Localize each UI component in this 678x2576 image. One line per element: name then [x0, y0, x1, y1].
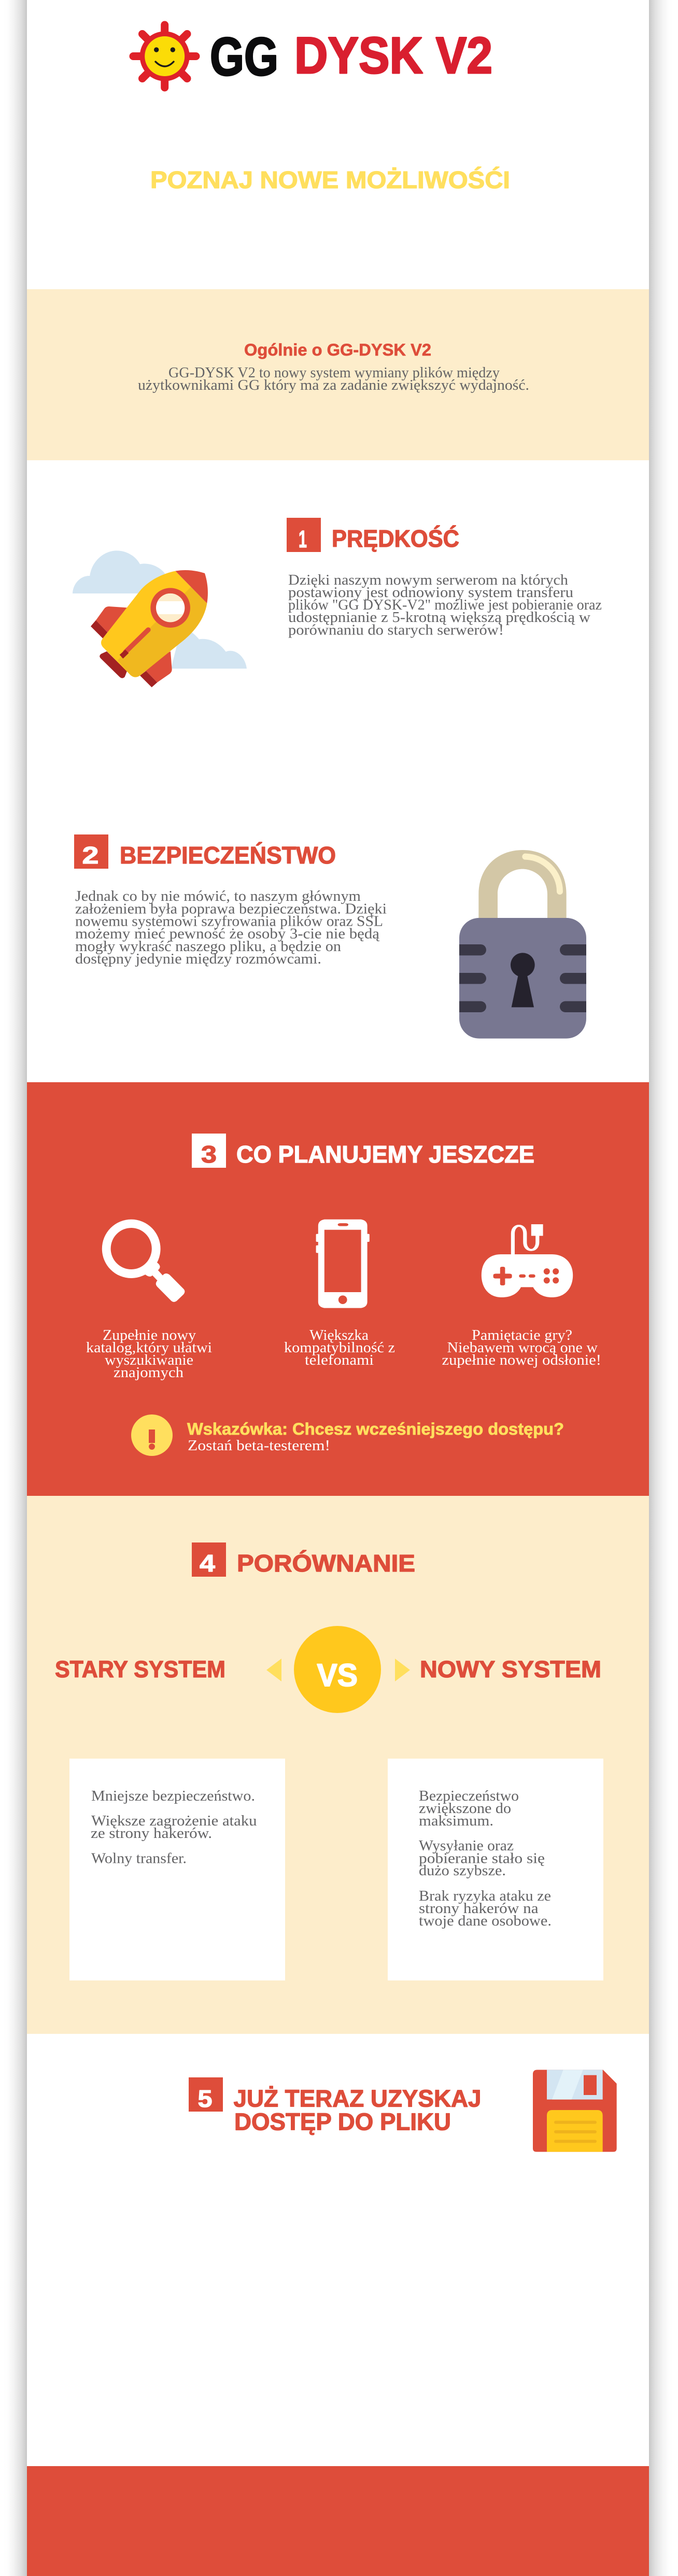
- caption: new catalog: znajomych: [114, 1364, 184, 1381]
- panel: section 4 comparison: [27, 1496, 649, 2034]
- security text: dostępny jedynie między rozmówcami.: [75, 951, 321, 967]
- card: old system: ze strony hakerów.: [91, 1825, 212, 1842]
- icon: exclamation: [131, 1414, 173, 1456]
- number badge 5: 5: [198, 2085, 213, 2112]
- speed text: [288, 572, 602, 639]
- card: new system: twoje dane osobowe.: [419, 1913, 552, 1929]
- card: new system: strony hakerów na: [419, 1901, 539, 1917]
- speed text: postawiony jest odnowiony system transferu: [288, 585, 573, 601]
- security text: mogły wykraść naszego pliku, a będzie on: [75, 939, 341, 955]
- security text: nowemu systemowi szyfrowania plików oraz SSL: [75, 914, 383, 930]
- caption: phone compatibility: Większka: [309, 1327, 369, 1343]
- heading: access: DOSTĘP DO PLIKU: [234, 2108, 451, 2135]
- header logo: [133, 25, 492, 88]
- heading: access: [233, 2085, 481, 2135]
- caption: new catalog: Zupełnie nowy: [103, 1327, 196, 1343]
- tip text: Zostań beta-testerem!: [188, 1437, 330, 1454]
- number badge 2: [74, 834, 108, 869]
- speed text: plików "GG DYSK-V2" możliwe jest pobieranie oraz: [288, 597, 602, 613]
- icon: magnifier: [102, 1220, 185, 1302]
- card: old system: Większe zagrożenie ataku: [91, 1813, 257, 1829]
- caption: new catalog: [86, 1327, 212, 1381]
- card: new system: Brak ryzyka ataku ze: [419, 1888, 551, 1904]
- number badge 4: [192, 1542, 226, 1577]
- caption: new catalog: katalog,który ułatwi: [86, 1339, 212, 1356]
- card: new system: dużo szybsze.: [419, 1863, 506, 1879]
- heading: comparison: PORÓWNANIE: [237, 1550, 415, 1577]
- number badge 4: 4: [200, 1550, 215, 1577]
- icon: rocket with clouds: [73, 550, 247, 687]
- panel: section 3 plans: [27, 1082, 649, 1496]
- speed text: Dzięki naszym nowym serwerom na których: [288, 572, 568, 588]
- security text: Jednak co by nie mówić, to naszym głównym: [75, 888, 361, 904]
- icon: smartphone: [316, 1220, 370, 1308]
- panel: section 5 access: [189, 2070, 617, 2152]
- logo wordmark GG: GG: [210, 27, 278, 87]
- arrow: left: [266, 1659, 281, 1681]
- number badge 1: 1: [299, 526, 307, 553]
- overview text: użytkownikami GG który ma za zadanie zwiększyć wydajność.: [138, 377, 529, 393]
- panel: section 2 security: [74, 834, 586, 1039]
- card: new system: [388, 1759, 603, 1980]
- caption: games: Niebawem wrocą one w: [447, 1339, 598, 1356]
- card: new system: maksimum.: [419, 1813, 493, 1829]
- panel: overview: [27, 289, 649, 460]
- caption: phone compatibility: telefonami: [305, 1352, 374, 1368]
- security text: założeniem była poprawa bezpieczeństwa. Dzięki: [75, 901, 387, 917]
- label: new system: NOWY SYSTEM: [420, 1656, 601, 1682]
- number badge 5: [189, 2077, 223, 2112]
- icon: padlock: [459, 850, 586, 1039]
- vs badge: VS: [317, 1658, 358, 1693]
- overview text: [138, 365, 529, 393]
- heading: access: JUŻ TERAZ UZYSKAJ: [233, 2085, 481, 2112]
- logo wordmark DYSK V2: DYSK V2: [294, 26, 492, 84]
- tip heading: Wskazówka: Chcesz wcześniejszego dostępu?: [187, 1420, 564, 1438]
- overview text: GG-DYSK V2 to nowy system wymiany plików między: [168, 365, 500, 381]
- caption: new catalog: wyszukiwanie: [105, 1352, 193, 1368]
- heading: plans: CO PLANUJEMY JESZCZE: [236, 1141, 534, 1168]
- number badge 3: [192, 1134, 226, 1168]
- number badge 3: 3: [201, 1141, 217, 1168]
- caption: games: [442, 1327, 601, 1368]
- card: new system: pobieranie stało się: [419, 1850, 545, 1867]
- panel: section 1 speed: [73, 518, 602, 687]
- title: POZNAJ NOWE MOŻLIWOŚĆI: [150, 166, 510, 193]
- card: old system: Mniejsze bezpieczeństwo.: [91, 1788, 255, 1804]
- label: old system: STARY SYSTEM: [55, 1656, 225, 1682]
- number badge 2: 2: [82, 842, 98, 869]
- caption: games: zupełnie nowej odsłonie!: [442, 1352, 601, 1368]
- caption: phone compatibility: [284, 1327, 395, 1368]
- heading: speed: PRĘDKOŚĆ: [332, 525, 459, 552]
- callout: tip: [131, 1414, 564, 1456]
- icon: game controller: [482, 1224, 573, 1297]
- caption: phone compatibility: kompatybilność z: [284, 1339, 395, 1356]
- card: new system: Wysyłanie oraz: [419, 1838, 514, 1854]
- vs badge: [294, 1626, 381, 1713]
- arrow: right: [395, 1659, 410, 1681]
- overview heading: Ogólnie o GG-DYSK V2: [244, 341, 431, 359]
- heading: security: BEZPIECZEŃSTWO: [120, 842, 336, 869]
- card: new system: Bezpieczeństwo: [419, 1788, 519, 1804]
- icon: floppy disk: [533, 2070, 617, 2152]
- card: new system: zwiększone do: [419, 1801, 511, 1817]
- icon: smiling sun: [133, 25, 196, 88]
- speed text: porównaniu do starych serwerów!: [288, 622, 504, 639]
- card: old system: [69, 1759, 285, 1980]
- footer band: [27, 2466, 649, 2576]
- security text: możemy mieć pewność że osoby 3-cie nie będą: [75, 926, 380, 942]
- speed text: udostępnianie z 5-krotną większą prędkością w: [288, 610, 591, 626]
- card: old system: Wolny transfer.: [91, 1850, 187, 1867]
- security text: [75, 888, 387, 967]
- number badge 1: [287, 518, 321, 553]
- caption: games: Pamiętacie gry?: [472, 1327, 572, 1343]
